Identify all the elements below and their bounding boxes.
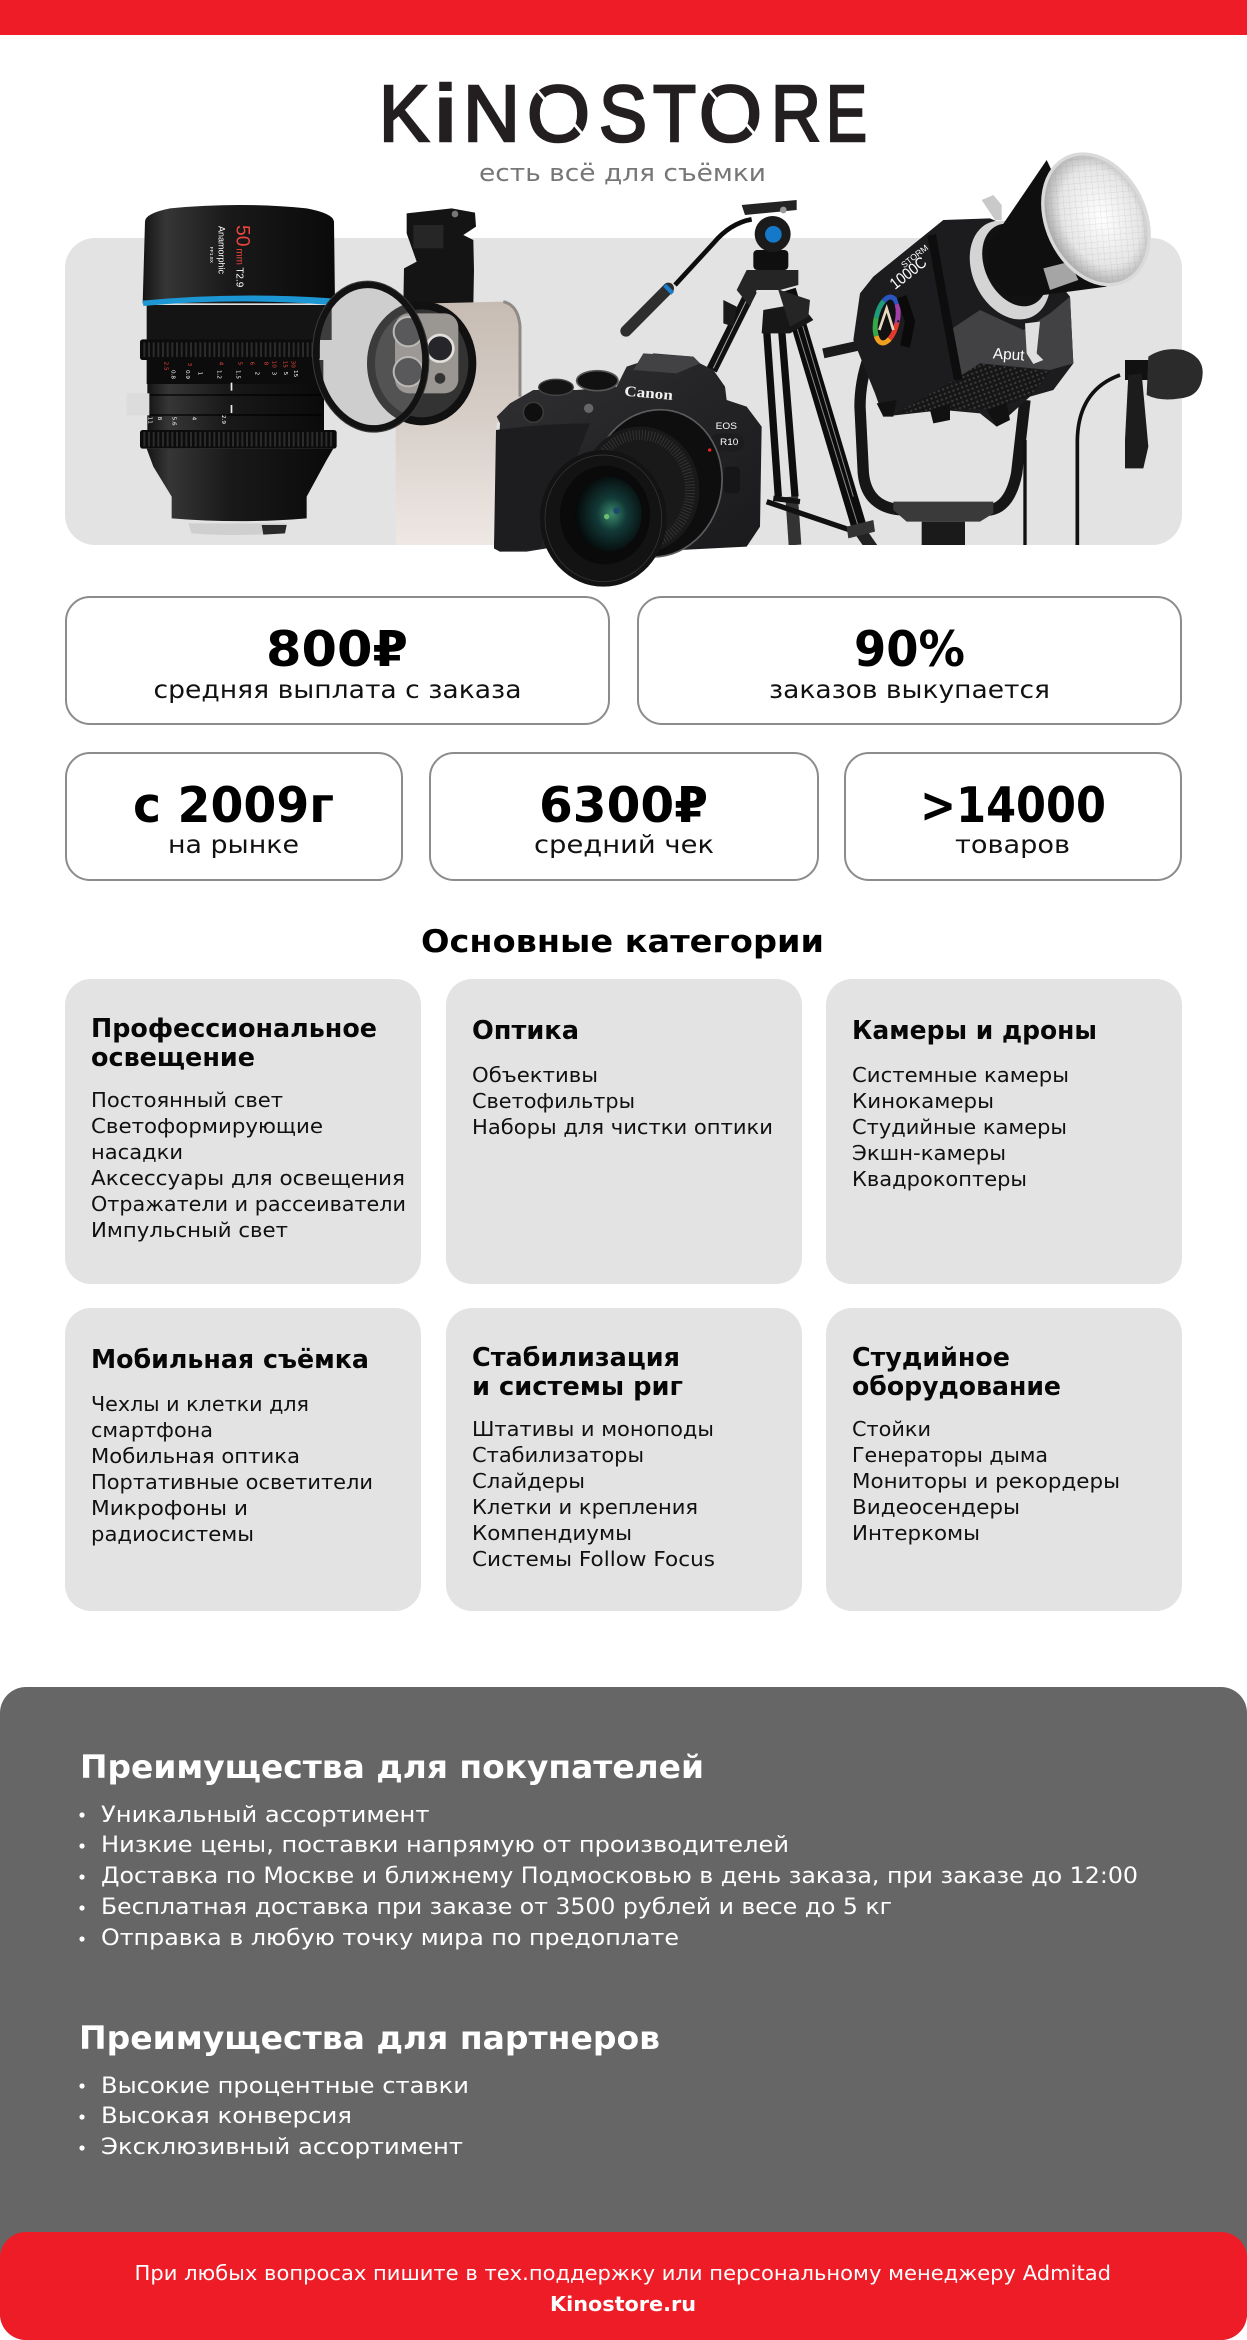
category panel: mobile shooting: Портативные осветители	[91, 1470, 373, 1494]
text block: advantages for partners: Преимущества для партнеров	[79, 2019, 660, 2057]
category panel: lighting: Постоянный свет	[91, 1088, 283, 1112]
icon: cine lens: 6	[249, 362, 255, 366]
category panel: cameras and drones: Экшн-камеры	[852, 1141, 1006, 1165]
category panel: lighting: Импульсный свет	[91, 1218, 288, 1242]
icon: cine lens	[127, 205, 337, 535]
icon: Aputure spotlight: Aput	[992, 345, 1026, 365]
category panel: cameras and drones: Кинокамеры	[852, 1089, 994, 1113]
category panel: studio equipment: оборудование	[852, 1372, 1061, 1402]
category panel: mobile shooting: смартфона	[91, 1418, 213, 1442]
icon: cine lens: mm	[234, 248, 245, 265]
category panel: optics: Объективы	[472, 1063, 598, 1087]
category panel: stabilization and rigs: Системы Follow Focus	[472, 1547, 715, 1571]
category panel: studio equipment: Мониторы и рекордеры	[852, 1469, 1120, 1493]
icon: cine lens: 8	[156, 417, 162, 421]
text block: advantages for partners: Высокая конверсия	[101, 2103, 352, 2129]
icon: Canon EOS R10 camera: R10	[720, 437, 738, 447]
icon: cine lens: 5.6	[171, 417, 177, 426]
icon: cine lens: 1.2	[215, 370, 221, 379]
category panel: lighting: насадки	[91, 1140, 183, 1164]
icon: cine lens: 2.9	[220, 415, 226, 424]
stat card: buyout rate: заказов выкупается	[769, 675, 1050, 704]
category panel: studio equipment: Видеосендеры	[852, 1495, 1020, 1519]
stat card: average payout: 800₽	[266, 621, 408, 678]
text block: advantages for buyers: Бесплатная доставка при заказе от 3500 рублей и весе до 5 кг	[101, 1894, 892, 1920]
panel: dark advantages background	[0, 1687, 1247, 2340]
category panel: mobile shooting: Чехлы и клетки для	[91, 1392, 309, 1416]
icon: cine lens: 1.5	[235, 370, 241, 379]
footer: red contact panel: При любых вопросах пишите в тех.поддержку или персональному менеджеру Admitad	[134, 2261, 1111, 2285]
text block: advantages for buyers	[79, 1748, 1138, 1951]
icon: cine lens: 2.5	[163, 362, 169, 371]
category panel: mobile shooting: радиосистемы	[91, 1522, 254, 1546]
category panel: optics: Оптика	[472, 1016, 579, 1046]
icon: cine lens: 50	[232, 225, 253, 246]
stat card: average payout	[66, 597, 609, 724]
icon: cine lens: 1	[197, 372, 203, 376]
stat card: average check	[430, 753, 818, 880]
icon: cine lens: FF1.8X	[208, 247, 214, 264]
category panel: optics	[446, 979, 802, 1284]
icon: cine lens: 15	[281, 361, 287, 368]
hero: lens, phone and filter	[127, 205, 521, 545]
category panel: stabilization and rigs	[446, 1308, 802, 1611]
logo: KiNOSTORE: R	[771, 69, 821, 158]
category panel: lighting: Аксессуары для освещения	[91, 1166, 405, 1190]
icon: Aputure spotlight: STORM	[899, 243, 930, 270]
category panel: studio equipment: Генераторы дыма	[852, 1443, 1048, 1467]
category panel: studio equipment	[826, 1308, 1182, 1611]
stat card: since 2009: на рынке	[168, 830, 299, 859]
category panel: cameras and drones: Квадрокоптеры	[852, 1167, 1027, 1191]
category panel: cameras and drones: Системные камеры	[852, 1063, 1069, 1087]
logo: KiNOSTORE: T	[653, 69, 696, 158]
icon: cine lens: 0.8	[169, 370, 175, 379]
icon: cine lens: 0.9	[184, 370, 190, 379]
stat card: since 2009: с 2009г	[133, 777, 334, 834]
stat card: buyout rate	[638, 597, 1181, 724]
category panel: lighting: Светоформирующие	[91, 1114, 323, 1138]
stat card: products: товаров	[955, 830, 1070, 859]
category panel: stabilization and rigs: Стабилизация	[472, 1343, 680, 1373]
text block: advantages for partners: Эксклюзивный ассортимент	[101, 2134, 463, 2160]
icon: cine lens: 11	[147, 417, 153, 424]
category panel: stabilization and rigs: Клетки и крепления	[472, 1495, 698, 1519]
logo: KiNOSTORE: E	[826, 69, 867, 158]
category panel: stabilization and rigs: и системы риг	[472, 1372, 683, 1402]
category panel: studio equipment: Студийное	[852, 1343, 1010, 1373]
icon: Aputure spotlight: 1000C	[887, 254, 930, 293]
stat card: average check: средний чек	[534, 830, 714, 859]
category panel: optics: Светофильтры	[472, 1089, 635, 1113]
text block: advantages for buyers: Отправка в любую точку мира по предоплате	[101, 1925, 679, 1951]
category panel: mobile shooting: Мобильная съёмка	[91, 1345, 369, 1375]
icon: cine lens: 30	[289, 361, 295, 368]
icon: Canon EOS R10 camera: Canon	[624, 384, 674, 404]
icon: cine lens: 3	[186, 363, 192, 367]
icon: cine lens: 15	[292, 370, 298, 378]
stat card: products: >14000	[920, 777, 1106, 834]
stat card: since 2009	[66, 753, 402, 880]
category panel: stabilization and rigs: Стабилизаторы	[472, 1443, 644, 1467]
icon: cine lens: Anamorphic	[217, 226, 227, 274]
footer: red contact panel: Kinostore.ru	[550, 2292, 696, 2316]
logo: KiNOSTORE: O	[527, 69, 590, 158]
logo: KiNOSTORE	[379, 69, 867, 158]
icon: cine lens: 3	[271, 372, 277, 376]
icon: cine lens: 5	[282, 372, 288, 376]
category panel: mobile shooting	[65, 1308, 421, 1611]
category panel: cameras and drones: Камеры и дроны	[852, 1016, 1097, 1046]
icon: cine lens: 4	[217, 362, 223, 366]
icon: cine lens: 8	[263, 362, 269, 366]
category panel: lighting: Профессиональное	[91, 1014, 377, 1044]
category panel: lighting	[65, 979, 421, 1284]
text block: advantages for buyers: Преимущества для покупателей	[80, 1748, 704, 1786]
icon: cine lens: 2	[253, 372, 259, 376]
stat card: average payout: средняя выплата с заказа	[154, 675, 522, 704]
heading: main categories: Основные категории	[421, 924, 824, 960]
category panel: optics: Наборы для чистки оптики	[472, 1115, 773, 1139]
category panel: mobile shooting: Мобильная оптика	[91, 1444, 300, 1468]
icon: phone with clip	[371, 208, 521, 545]
stat card: average check: 6300₽	[539, 777, 708, 834]
icon: Canon EOS R10 camera	[494, 353, 762, 587]
category panel: studio equipment: Интеркомы	[852, 1521, 980, 1545]
hero panel background	[65, 238, 1182, 545]
logo: KiNOSTORE: i	[434, 69, 457, 158]
category panel: cameras and drones: Студийные камеры	[852, 1115, 1067, 1139]
category panel: lighting: освещение	[91, 1043, 255, 1073]
footer: red contact panel	[0, 2232, 1247, 2340]
hero: light, tripod clipped to panel	[626, 137, 1170, 550]
tagline: есть всё для съёмки	[479, 159, 766, 187]
logo: KiNOSTORE: K	[379, 69, 429, 158]
icon: cine lens: 5	[237, 362, 243, 366]
icon: tripod with fluid head	[626, 200, 875, 550]
icon: cine lens: T2.9	[234, 267, 245, 288]
text block: advantages for partners: Высокие процентные ставки	[101, 2073, 469, 2099]
text block: advantages for partners	[79, 2019, 660, 2160]
stat card: buyout rate: 90%	[854, 621, 965, 678]
text block: advantages for buyers: Низкие цены, поставки напрямую от производителей	[101, 1832, 789, 1858]
icon: cine lens: 4	[191, 417, 197, 421]
category panel: mobile shooting: Микрофоны и	[91, 1496, 248, 1520]
logo: KiNOSTORE: S	[599, 69, 647, 158]
category panel: cameras and drones	[826, 979, 1182, 1284]
icon: Aputure spotlight	[823, 137, 1170, 547]
category panel: studio equipment: Стойки	[852, 1417, 931, 1441]
category panel: stabilization and rigs: Слайдеры	[472, 1469, 585, 1493]
top red bar	[0, 0, 1247, 35]
category panel: stabilization and rigs: Компендиумы	[472, 1521, 632, 1545]
text block: advantages for buyers: Доставка по Москве и ближнему Подмосковью в день заказа, при заказе до 12:00	[101, 1863, 1138, 1889]
stat card: products	[845, 753, 1181, 880]
icon: cine lens: 10	[271, 361, 277, 368]
category panel: lighting: Отражатели и рассеиватели	[91, 1192, 406, 1216]
icon: variable ND filter ring	[305, 275, 436, 438]
text block: advantages for buyers: Уникальный ассортимент	[101, 1802, 430, 1828]
icon: Canon EOS R10 camera: EOS	[716, 421, 737, 431]
icon: lavalier microphone	[1077, 349, 1203, 545]
category panel: stabilization and rigs: Штативы и моноподы	[472, 1417, 714, 1441]
logo: KiNOSTORE: N	[463, 69, 520, 158]
logo: KiNOSTORE: O	[699, 69, 762, 158]
